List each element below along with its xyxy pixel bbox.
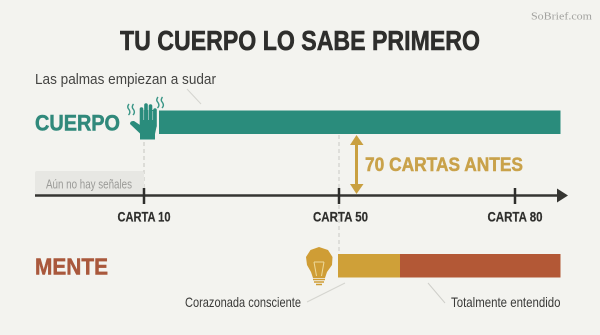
watermark: SoBrief.com [531,10,592,22]
body bar [159,110,560,134]
annotation: conscious hunch: Corazonada consciente [185,294,301,310]
mind bar: understood segment [400,254,560,278]
label: body: CUERPO [35,110,120,136]
callout: no signals yet: Aún no hay señales [46,178,132,192]
label: mind: MENTE [35,254,108,280]
label: card 80: CARTA 80 [488,210,542,224]
dashed guide: card 50 [338,135,340,254]
annotation: palms start sweating: Las palmas empiezan a sudar [35,72,216,88]
callout: 70 cards earlier: 70 CARTAS ANTES [365,154,523,176]
dashed guide: card 10 [143,142,145,188]
annotation: conscious hunch [185,283,345,310]
label: card 10: CARTA 10 [118,210,170,224]
annotation: palms start sweating [35,72,216,104]
timeline axis [35,188,568,204]
tick: card 10 [143,188,145,204]
annotation: fully understood [428,283,561,310]
tick: card 80 [514,188,516,204]
callout: no signals yet [35,171,144,195]
double arrow: gap [350,135,364,194]
title: TU CUERPO LO SABE PRIMERO [120,25,480,56]
mind bar: hunch segment [338,254,400,278]
icon: sweating hand [128,97,163,140]
tick: card 50 [338,188,340,204]
annotation: fully understood: Totalmente entendido [451,294,561,310]
icon: light bulb [306,247,332,284]
label: card 50: CARTA 50 [313,210,368,224]
